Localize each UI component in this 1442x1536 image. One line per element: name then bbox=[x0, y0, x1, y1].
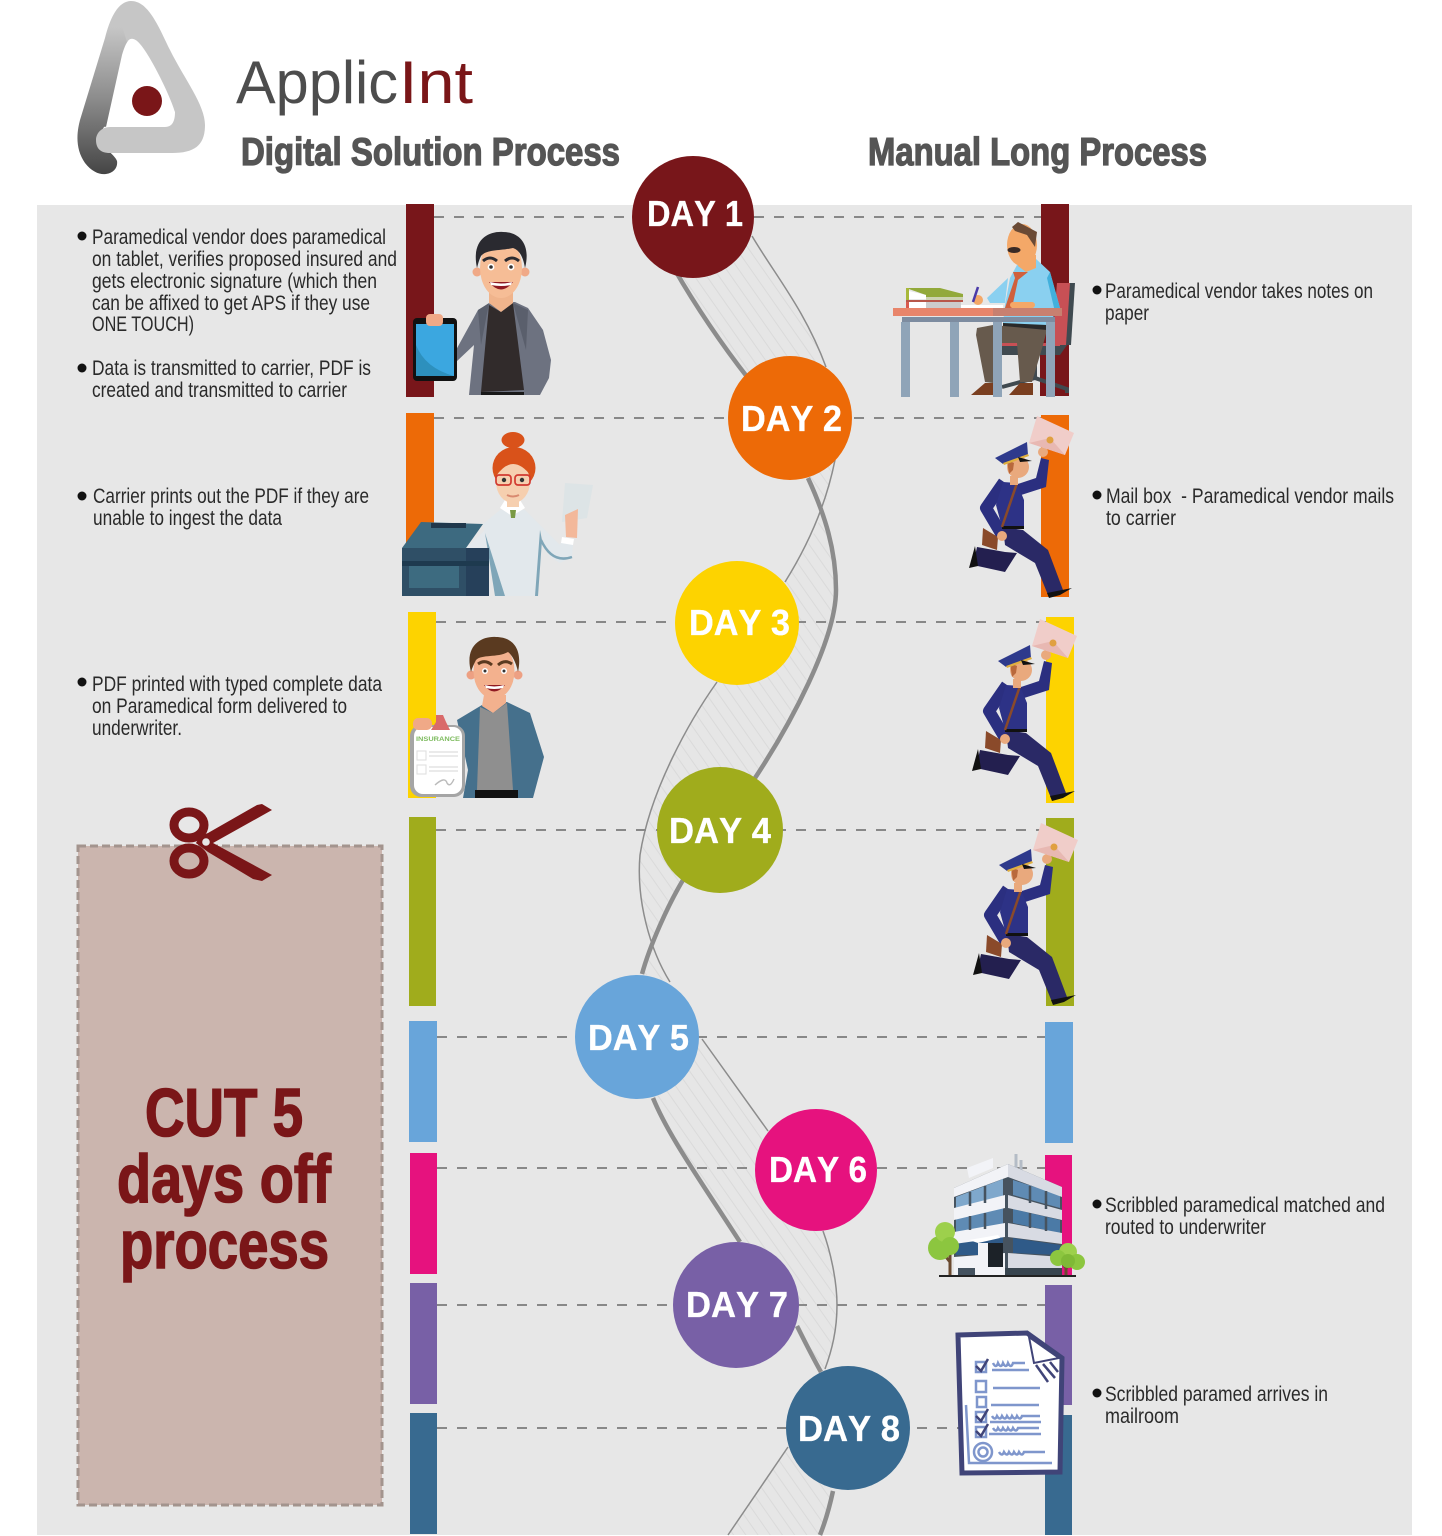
panel: cut 5 days callout: process bbox=[120, 1207, 329, 1283]
text: day 1 digital: created and transmitted to carrier bbox=[92, 379, 347, 402]
day 6 badge bbox=[755, 1109, 877, 1231]
illustration: postman day 2 bbox=[969, 416, 1074, 598]
day 1 badge bbox=[632, 156, 754, 278]
text: day 3 digital bbox=[78, 673, 382, 740]
text: day 6 manual: Scribbled paramedical matched and bbox=[1105, 1194, 1385, 1217]
text: day 7 manual bbox=[1092, 1383, 1328, 1428]
left timeline bars bbox=[406, 204, 437, 1534]
day 2 badge bbox=[728, 356, 852, 480]
heading: digital process: Digital Solution Process bbox=[241, 131, 620, 174]
illustration: woman at printer bbox=[402, 432, 593, 596]
text: day 1 digital: gets electronic signature (which then bbox=[92, 270, 377, 293]
brand name bbox=[236, 49, 473, 116]
text: day 2 digital bbox=[78, 485, 369, 530]
logo bbox=[77, 1, 205, 174]
text: day 1 digital: on tablet, verifies proposed insured and bbox=[92, 248, 397, 271]
day 7 badge: DAY 7 bbox=[686, 1284, 788, 1325]
text: day 2 manual: Mail box - Paramedical vendor mails bbox=[1106, 485, 1394, 508]
panel: cut 5 days callout: days off bbox=[117, 1141, 331, 1217]
illustration: man with tablet bbox=[413, 232, 551, 395]
panel: cut 5 days callout: CUT 5 bbox=[145, 1075, 303, 1151]
text: day 7 manual: Scribbled paramed arrives in bbox=[1105, 1383, 1328, 1406]
text: day 7 manual: mailroom bbox=[1105, 1405, 1179, 1428]
day 7 badge bbox=[673, 1242, 799, 1368]
illustration: paper checklist bbox=[958, 1333, 1062, 1473]
day 8 badge bbox=[786, 1366, 910, 1490]
text: day 3 digital: PDF printed with typed complete data bbox=[92, 673, 382, 696]
day 3 badge: DAY 3 bbox=[689, 602, 790, 643]
text: day 1 digital bbox=[78, 226, 397, 402]
illustration: man with insurance form bbox=[410, 637, 544, 798]
text: day 6 manual: routed to underwriter bbox=[1105, 1216, 1266, 1239]
day 2 badge: DAY 2 bbox=[741, 398, 842, 439]
heading: manual process: Manual Long Process bbox=[868, 131, 1207, 174]
day 3 badge bbox=[675, 561, 799, 685]
illustration: postman day 3 bbox=[972, 619, 1077, 801]
text: day 2 manual bbox=[1092, 485, 1394, 530]
day 5 badge: DAY 5 bbox=[588, 1017, 689, 1058]
text: day 2 digital: unable to ingest the data bbox=[93, 507, 282, 530]
icon: scissors bbox=[174, 804, 272, 881]
right timeline bars bbox=[1041, 204, 1074, 1535]
text: day 1 digital: Data is transmitted to carrier, PDF is bbox=[92, 357, 371, 380]
text: day 1 manual bbox=[1092, 280, 1373, 325]
text: day 3 digital: on Paramedical form delivered to bbox=[92, 695, 347, 718]
text: day 2 manual: to carrier bbox=[1106, 507, 1176, 530]
day 8 badge: DAY 8 bbox=[798, 1408, 900, 1449]
ribbon connecting the days bbox=[639, 236, 837, 1535]
text: day 6 manual bbox=[1092, 1194, 1385, 1239]
illustration: man with insurance form: INSURANCE bbox=[416, 736, 461, 743]
text: day 1 digital: ONE TOUCH) bbox=[92, 313, 194, 336]
text: day 1 digital: can be affixed to get APS if they use bbox=[92, 292, 370, 315]
text: day 2 digital: Carrier prints out the PDF if they are bbox=[93, 485, 369, 508]
illustration: postman day 4 bbox=[973, 823, 1078, 1005]
illustration: man at desk writing bbox=[893, 222, 1075, 397]
day 1 badge: DAY 1 bbox=[647, 193, 743, 234]
brand name: Applic bbox=[236, 49, 398, 116]
day 4 badge: DAY 4 bbox=[669, 810, 771, 851]
day 6 badge: DAY 6 bbox=[769, 1149, 867, 1190]
illustration: office building bbox=[928, 1154, 1085, 1277]
text: day 3 digital: underwriter. bbox=[92, 717, 182, 740]
dashed day connectors bbox=[434, 217, 1046, 1428]
day 5 badge bbox=[575, 975, 699, 1099]
text: day 1 digital: Paramedical vendor does paramedical bbox=[92, 226, 386, 249]
day 4 badge bbox=[657, 767, 783, 893]
panel: cut 5 days callout bbox=[78, 846, 382, 1505]
brand name: Int bbox=[399, 49, 473, 116]
text: day 1 manual: paper bbox=[1105, 302, 1149, 325]
text: day 1 manual: Paramedical vendor takes notes on bbox=[1105, 280, 1373, 303]
